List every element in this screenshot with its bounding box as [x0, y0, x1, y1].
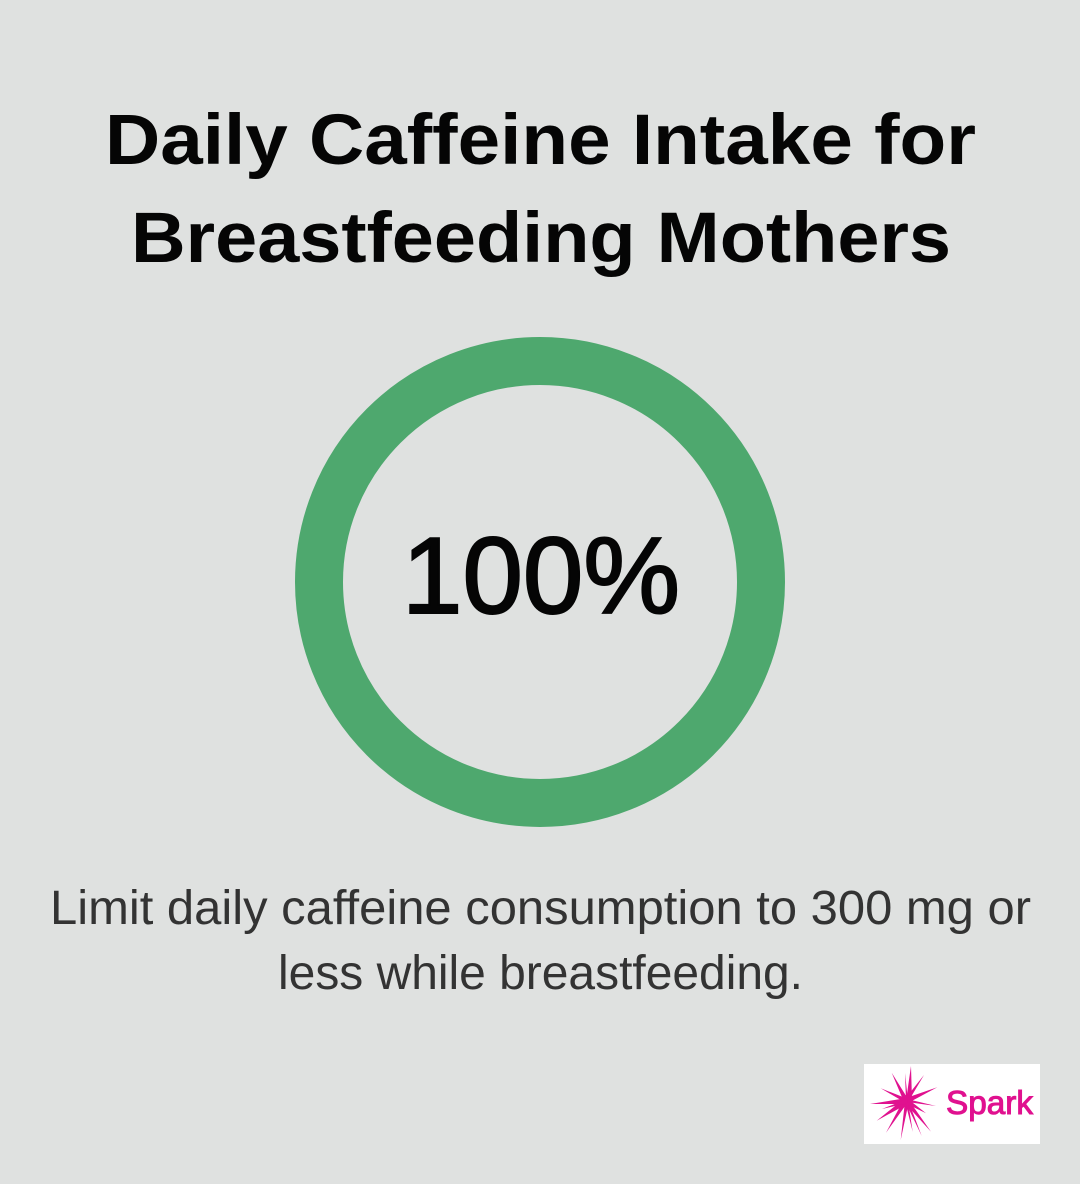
donut chart: 100% ring: [319, 361, 761, 803]
icon: spark burst: [870, 1066, 937, 1140]
description text: less while breastfeeding.: [278, 947, 803, 1000]
description text: Limit daily caffeine consumption to 300 mg or: [50, 882, 1031, 935]
title: [105, 101, 976, 278]
description text: [50, 882, 1031, 1000]
logo wordmark: Spark: [946, 1084, 1033, 1121]
value: 100%: 100%: [402, 515, 680, 637]
title: Daily Caffeine Intake for: [105, 101, 976, 180]
title: Breastfeeding Mothers: [131, 199, 951, 278]
logo: Spark: [864, 1064, 1040, 1144]
